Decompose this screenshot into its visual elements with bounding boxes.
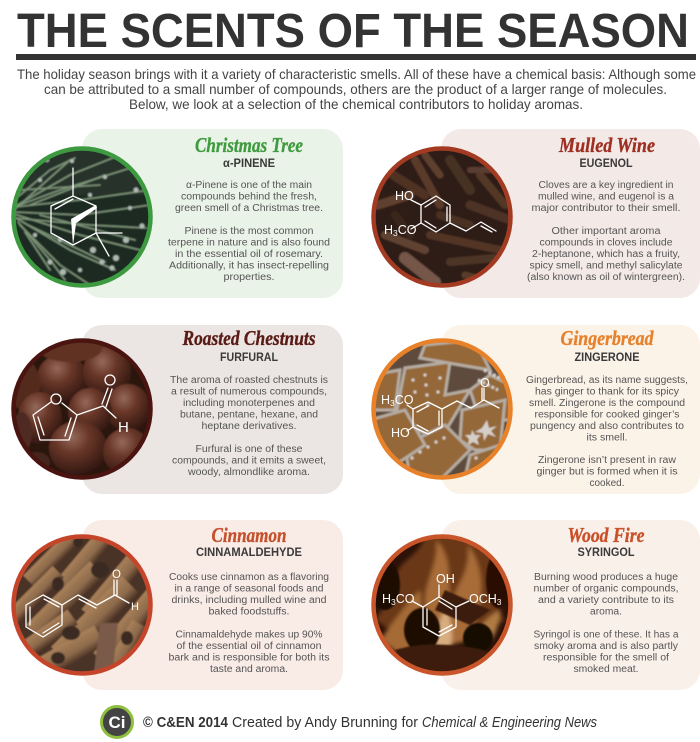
photo: fire <box>376 538 508 672</box>
molecule: syringol: CO <box>396 592 415 606</box>
molecule: eugenol: 3 <box>393 228 398 238</box>
panel: wood fire <box>370 520 700 690</box>
description: compounds behind the fresh, <box>181 192 317 202</box>
footer credit: Created by Andy Brunning for <box>232 715 418 731</box>
molecule: cinnamaldehyde: O <box>112 569 121 581</box>
panel background <box>82 325 343 494</box>
description: compounds, and it emits a sweet, <box>172 456 326 466</box>
molecule: syringol: 3 <box>497 597 502 607</box>
description: in a range of seasonal foods and <box>174 584 324 594</box>
footer credit <box>143 715 597 731</box>
panel background <box>441 129 700 298</box>
molecule: furfural: H <box>118 419 129 436</box>
description <box>168 572 330 675</box>
description: Other important aroma <box>552 226 661 237</box>
description: smoky aroma and is also partly <box>534 641 678 652</box>
description <box>526 375 688 489</box>
description: compounds in cloves include <box>540 238 673 248</box>
description: number of organic compounds, <box>534 584 678 594</box>
panel background <box>441 520 700 690</box>
description: properties. <box>224 272 274 283</box>
description <box>170 375 328 478</box>
description: The aroma of roasted chestnuts is <box>170 375 328 386</box>
description: Zingerone isn’t present in raw <box>538 455 677 466</box>
description: taste and aroma. <box>210 664 288 675</box>
panel: roasted chestnuts <box>8 325 343 494</box>
molecule: zingerone: O <box>480 376 490 390</box>
photo ring <box>14 148 150 286</box>
description: pungency and also contributes to <box>530 421 684 432</box>
description: Additionally, it has insect-repelling <box>169 260 329 272</box>
intro text <box>17 66 696 112</box>
molecule: syringol <box>382 572 502 636</box>
description: responsible for the smell of <box>543 652 669 664</box>
molecule: syringol: H <box>382 592 391 606</box>
molecule: zingerone <box>381 376 499 440</box>
photo: cloves <box>376 150 508 284</box>
molecule: cinnamaldehyde: H <box>131 601 139 613</box>
molecule: zingerone: HO <box>391 426 410 440</box>
description: major contributor to their smell. <box>532 203 680 214</box>
molecule: syringol: OCH <box>469 592 497 606</box>
description: bark and is responsible for both its <box>168 652 330 664</box>
description: responsible for cooked ginger’s <box>534 410 680 420</box>
description: Cinnamaldehyde makes up 90% <box>176 630 323 640</box>
compound name: CINNAMALDEHYDE <box>196 547 302 559</box>
panel background <box>441 325 700 494</box>
description: Syringol is one of these. It has a <box>534 630 679 640</box>
description: its smell. <box>586 432 628 444</box>
footer credit: Chemical & Engineering News <box>422 715 597 731</box>
description: Cooks use cinnamon as a flavoring <box>169 572 329 583</box>
footer credit: © C&EN 2014 <box>143 715 228 731</box>
description: of the essential oil of cinnamon <box>176 641 322 652</box>
molecule: zingerone: CO <box>395 393 414 407</box>
description: butane, pentane, hexane, and <box>180 410 318 420</box>
photo ring <box>374 148 510 286</box>
icon: C&EN logo <box>102 706 132 738</box>
description: smell. Zingerone is the compound <box>529 398 685 409</box>
description: baked foodstuffs. <box>208 606 290 618</box>
icon: C&EN logo: Ci <box>108 713 126 732</box>
description: Gingerbread, as its name suggests, <box>526 375 688 386</box>
compound name: FURFURAL <box>220 352 278 364</box>
photo ring <box>374 536 510 674</box>
molecule: cinnamaldehyde <box>26 569 139 637</box>
description: woody, almondlike aroma. <box>187 467 310 478</box>
photo: pine needles <box>16 150 148 284</box>
description: mulled wine, and eugenol is a <box>538 192 674 202</box>
panel background <box>82 520 343 690</box>
photo: cinnamon sticks <box>16 538 148 672</box>
description: a result of numerous compounds, <box>171 386 327 398</box>
description <box>534 572 679 675</box>
panel: christmas tree <box>10 129 343 298</box>
description: Burning wood produces a huge <box>534 572 678 583</box>
molecule: eugenol: CO <box>398 223 417 237</box>
heading: Cinnamon <box>212 523 286 547</box>
molecule: zingerone: 3 <box>390 398 395 408</box>
description: smoked meat. <box>574 664 638 675</box>
description: ginger but is formed when it is <box>536 466 678 478</box>
molecule: syringol: 3 <box>391 597 396 607</box>
title rule <box>16 54 696 60</box>
heading: Gingerbread <box>560 326 654 350</box>
description: cooked. <box>590 478 624 489</box>
panel: mulled wine <box>370 129 700 298</box>
panel background <box>82 129 343 298</box>
description: drinks, including mulled wine and <box>172 595 326 606</box>
molecule: eugenol: HO <box>395 189 414 203</box>
molecule: eugenol: H <box>384 223 393 237</box>
photo ring <box>14 340 150 478</box>
description: terpene in nature and is also found <box>168 238 330 248</box>
panel: cinnamon <box>0 520 343 690</box>
molecule: zingerone: H <box>381 393 390 407</box>
compound name: EUGENOL <box>580 158 632 170</box>
description: Furfural is one of these <box>196 444 303 455</box>
description <box>168 180 330 283</box>
description: 2-heptanone, which has a fruity, <box>532 249 680 260</box>
description: aroma. <box>590 606 622 618</box>
description: heptane derivatives. <box>202 421 296 432</box>
description: spicy smell, and methyl salicylate <box>530 260 683 272</box>
heading: Wood Fire <box>568 523 644 547</box>
compound name: α-PINENE <box>223 158 275 170</box>
description: (also known as oil of wintergreen). <box>527 272 685 283</box>
photo: gingerbread cookies <box>376 342 508 476</box>
description: α-Pinene is one of the main <box>186 180 312 191</box>
intro text: Below, we look at a selection of the chemical contributors to holiday aromas. <box>129 96 583 112</box>
description: green smell of a Christmas tree. <box>175 203 323 214</box>
photo ring <box>14 536 150 674</box>
description: Cloves are a key ingredient in <box>538 180 674 191</box>
compound name: SYRINGOL <box>578 547 634 559</box>
photo: chestnuts <box>16 342 148 476</box>
compound name: ZINGERONE <box>574 352 640 364</box>
photo ring <box>374 340 510 478</box>
description: Pinene is the most common <box>184 226 314 237</box>
panel: gingerbread <box>370 325 700 494</box>
description <box>527 180 685 283</box>
description: has ginger to thank for its spicy <box>535 386 679 398</box>
molecule: furfural <box>33 375 129 440</box>
description: in the essential oil of rosemary. <box>175 249 323 260</box>
description: and a variety contribute to its <box>538 595 674 606</box>
molecule: eugenol <box>384 189 496 238</box>
description: including monoterpenes and <box>183 398 315 409</box>
heading: Mulled Wine <box>558 133 655 157</box>
intro text: can be attributed to a small number of compounds, others are the product of a larger range of molecules. <box>44 81 667 97</box>
molecule: alpha-pinene <box>51 168 122 256</box>
heading: Christmas Tree <box>195 133 303 157</box>
molecule: syringol: OH <box>436 572 455 586</box>
heading: Roasted Chestnuts <box>182 326 316 350</box>
